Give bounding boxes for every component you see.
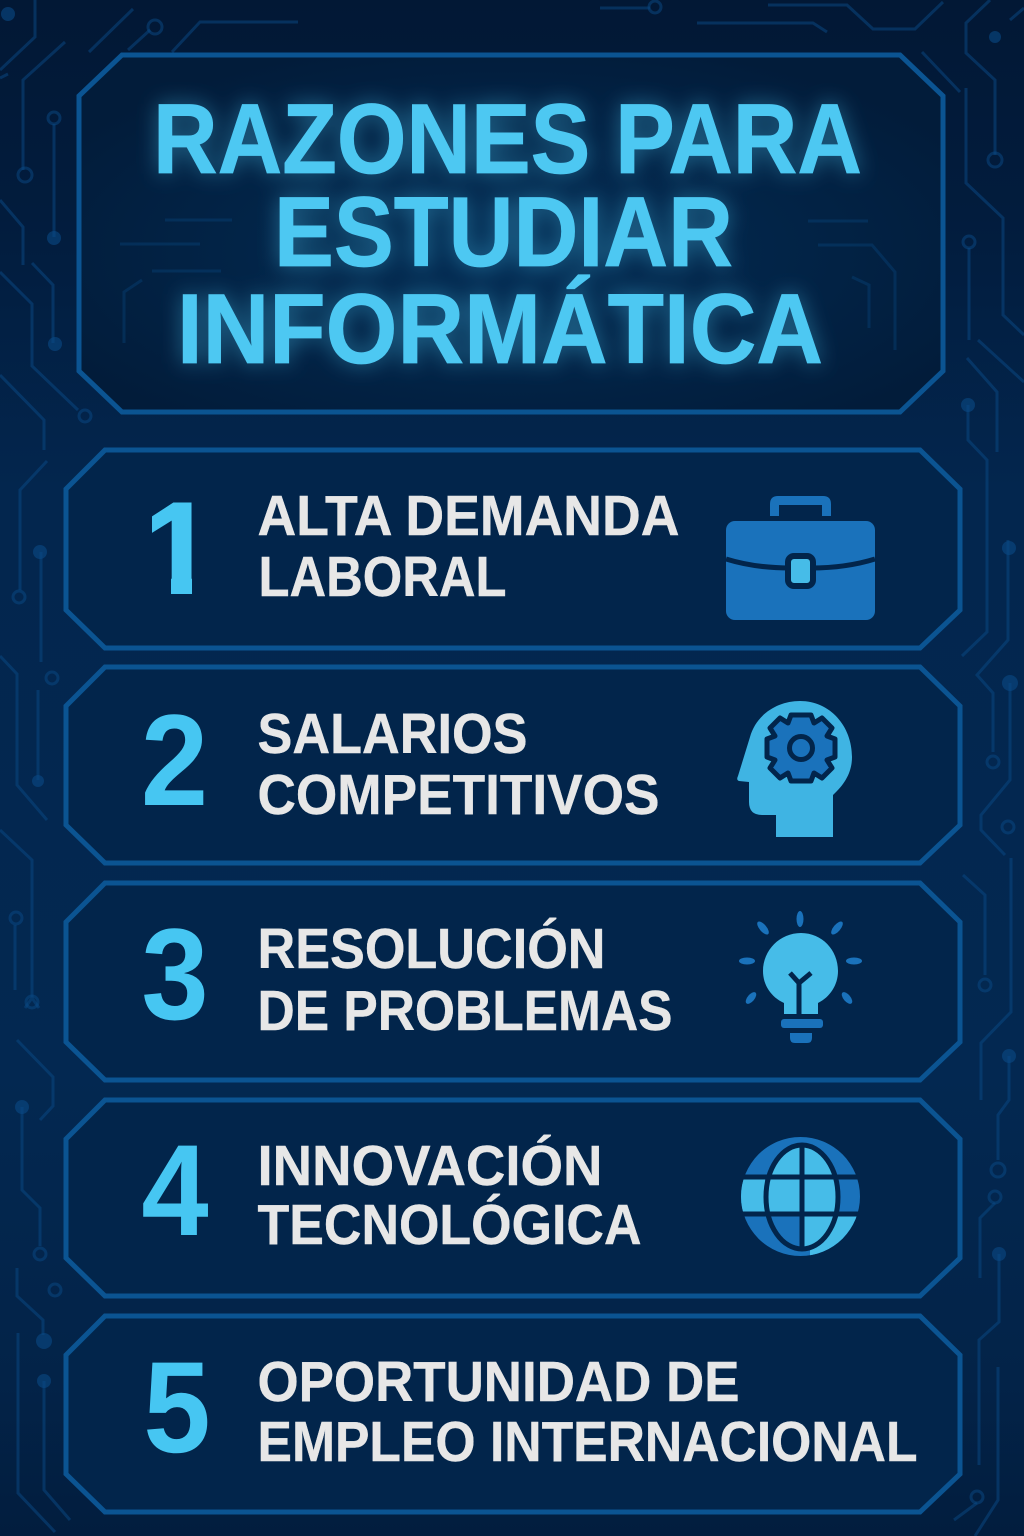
title glow: ESTUDIAR bbox=[274, 176, 733, 287]
text: salarios competitivos bbox=[258, 702, 660, 827]
title: INFORMÁTICA bbox=[177, 273, 823, 384]
panel: title bbox=[79, 55, 943, 412]
text: resolucion de problemas bbox=[258, 917, 672, 1043]
title bbox=[153, 83, 862, 384]
title glow: INFORMÁTICA bbox=[177, 273, 823, 384]
panel: reason 2 bbox=[66, 667, 960, 863]
text: oportunidad de empleo internacional: OPORTUNIDAD DE bbox=[258, 1350, 740, 1414]
icon: briefcase bbox=[726, 496, 875, 620]
panel: reason 3 bbox=[66, 883, 960, 1080]
title glow: RAZONES PARA bbox=[153, 83, 862, 194]
panel: reason 1 bbox=[66, 450, 960, 648]
title: RAZONES PARA bbox=[153, 83, 862, 194]
text: alta demanda laboral: ALTA DEMANDA bbox=[258, 484, 680, 548]
icon: light bulb bbox=[739, 911, 862, 1043]
text: oportunidad de empleo internacional: EMPLEO INTERNACIONAL bbox=[258, 1410, 918, 1474]
text: oportunidad de empleo internacional bbox=[258, 1350, 918, 1474]
icon: head with gear bbox=[737, 701, 852, 837]
panel: reason 5 bbox=[66, 1316, 960, 1512]
text: innovacion tecnologica bbox=[258, 1134, 642, 1257]
text: resolucion de problemas: RESOLUCIÓN bbox=[258, 917, 606, 981]
text: alta demanda laboral: LABORAL bbox=[258, 545, 506, 609]
text: alta demanda laboral bbox=[258, 484, 680, 609]
panel: reason 4 bbox=[66, 1100, 960, 1296]
number 5: 5 bbox=[143, 1334, 211, 1480]
number 2: 2 bbox=[141, 687, 208, 833]
title: ESTUDIAR bbox=[274, 176, 733, 287]
text: salarios competitivos: SALARIOS bbox=[258, 702, 528, 766]
number 4: 4 bbox=[141, 1117, 209, 1263]
text: innovacion tecnologica: TECNOLÓGICA bbox=[258, 1193, 642, 1257]
text: innovacion tecnologica: INNOVACIÓN bbox=[258, 1134, 602, 1198]
text: salarios competitivos: COMPETITIVOS bbox=[258, 763, 660, 827]
number 3: 3 bbox=[141, 901, 209, 1047]
icon: globe bbox=[740, 1137, 862, 1260]
title glow bbox=[153, 83, 862, 384]
text: resolucion de problemas: DE PROBLEMAS bbox=[258, 979, 672, 1043]
number 1: 1 bbox=[142, 475, 215, 621]
